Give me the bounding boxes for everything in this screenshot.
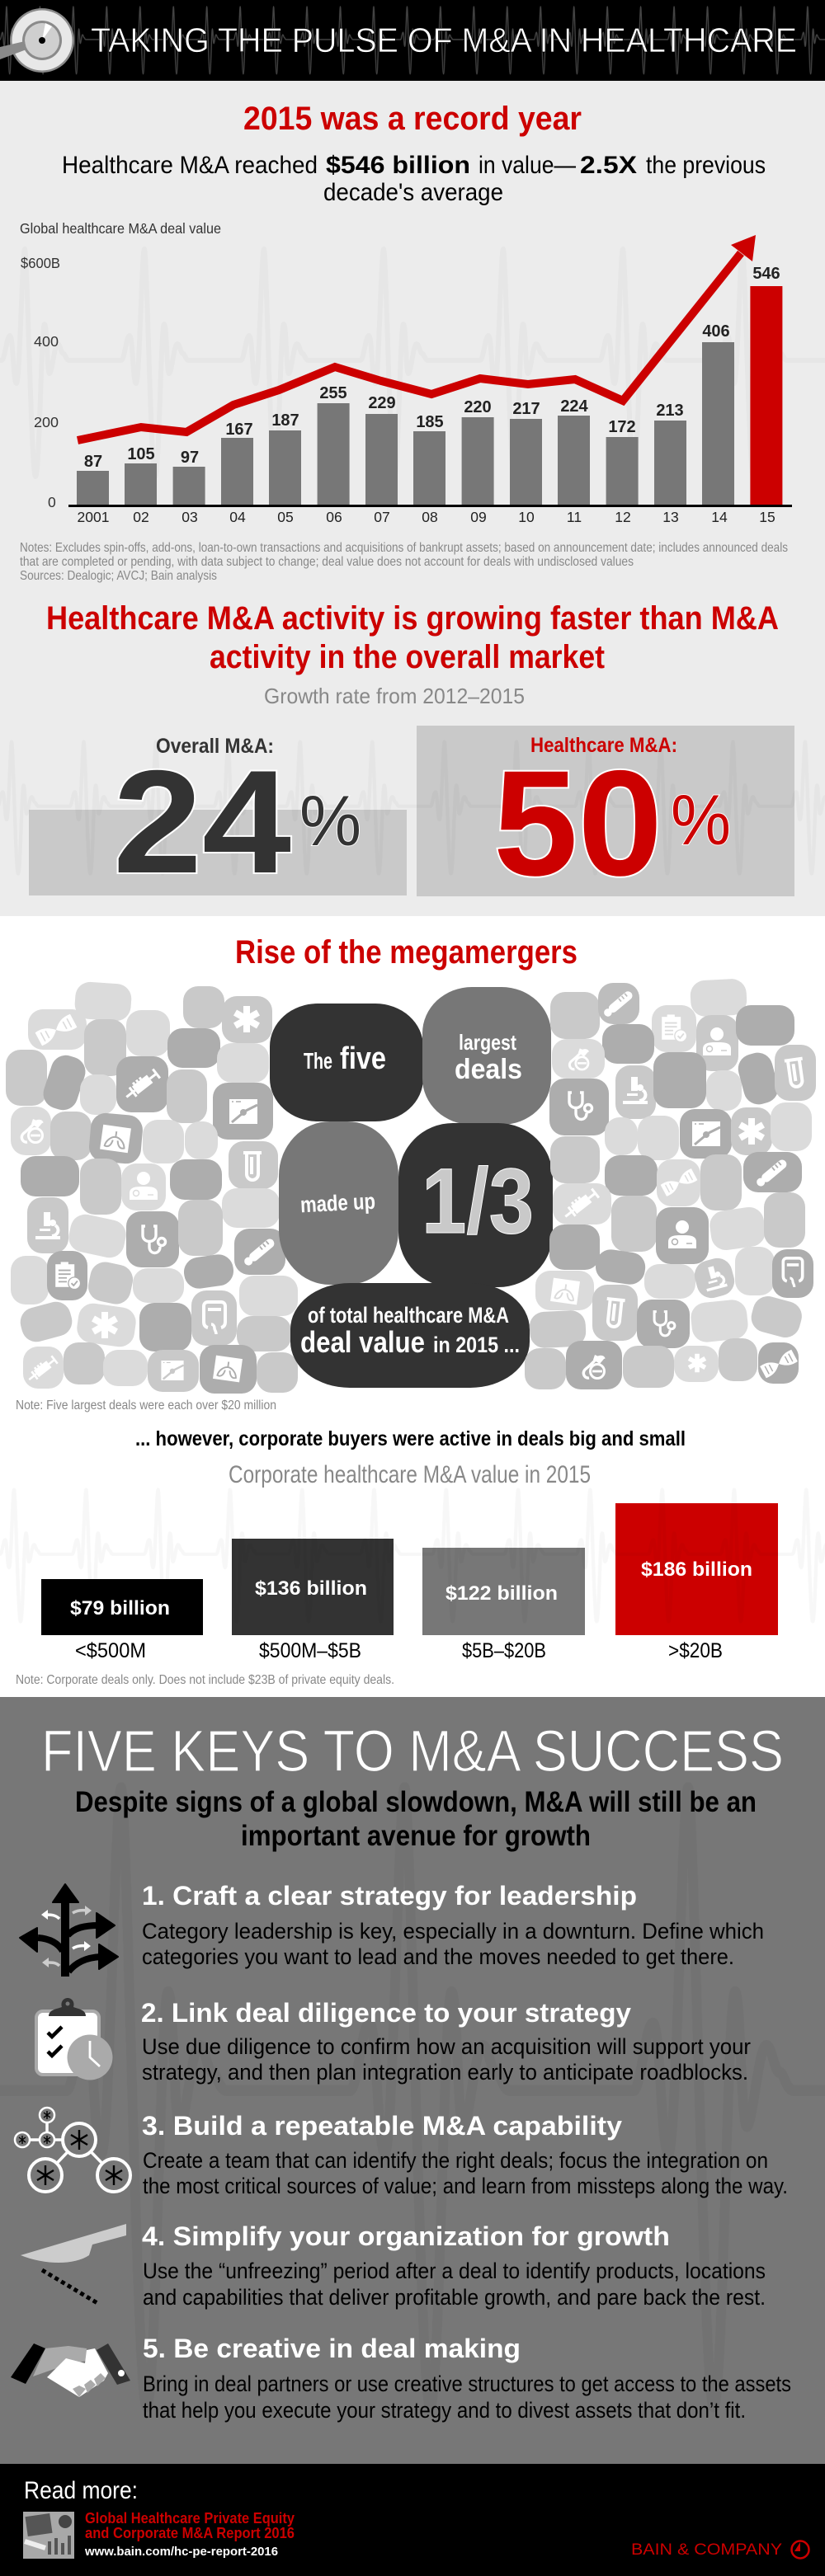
- callout: of total deal value: of total healthcare M&A: [308, 1303, 509, 1328]
- bar value labels: 87: [84, 453, 102, 471]
- y axis labels: $600B: [21, 255, 60, 271]
- bar value labels: 105: [127, 445, 155, 463]
- x axis years: 02: [133, 509, 149, 525]
- bar value labels: 220: [464, 398, 492, 416]
- icon: lungs x-ray: [88, 1112, 144, 1165]
- text block: record year summary: 2.5X: [580, 152, 637, 179]
- bar category labels: >$20B: [668, 1639, 723, 1662]
- heartbeat watermark: growth: [0, 730, 825, 883]
- bar: $500M to $5B: [232, 1539, 394, 1635]
- bar value labels: 255: [319, 384, 347, 402]
- chart: corporate healthcare M&A value: [0, 1478, 825, 1662]
- icon: thermometer: [598, 983, 639, 1024]
- icon: lungs x-ray: [535, 1271, 594, 1310]
- callout: the five: [270, 1004, 423, 1121]
- icon: test tube: [592, 1285, 638, 1341]
- x axis years: 11: [567, 509, 582, 525]
- heading: rise of the megamergers: Rise of the megamergers: [235, 934, 578, 971]
- icon: iv bag: [191, 1290, 237, 1346]
- logo: Bain & Company: BAIN & COMPANY: [631, 2541, 782, 2559]
- text block: report title: and Corporate M&A Report 2016: [85, 2525, 295, 2541]
- note: corporate deals: Note: Corporate deals only. Does not include $23B of private equity deals.: [16, 1673, 394, 1687]
- bar value labels: $186 billion: [641, 1558, 752, 1581]
- trend arrow: [78, 235, 756, 440]
- panel: footer: [0, 2464, 825, 2576]
- bar value labels: 229: [368, 394, 396, 412]
- x axis years: 09: [470, 509, 487, 525]
- bar value labels: 217: [512, 400, 540, 418]
- image: report cover thumbnail: [23, 2512, 74, 2559]
- bar value labels: 187: [271, 411, 299, 430]
- panel: five keys to M&A success: [0, 1697, 825, 2464]
- icon: branching arrows: [20, 1884, 118, 1977]
- text block: record year summary: in value—: [478, 152, 576, 179]
- icon: medical star: [75, 1301, 138, 1349]
- icon: dna: [758, 1342, 799, 1384]
- icon: capability network: [15, 2108, 130, 2192]
- x axis years: 10: [518, 509, 535, 525]
- text block: report title: www.bain.com/hc-pe-report-2016: [84, 2545, 278, 2559]
- x axis years: 2001: [78, 509, 109, 525]
- bar category labels: <$500M: [75, 1639, 146, 1662]
- text block: record year summary: $546 billion: [326, 152, 470, 179]
- key 3 text: Create a team that can identify the right deals; focus the integration on: [143, 2148, 768, 2173]
- callout: of total deal value: [290, 1283, 530, 1388]
- icon: medical star: [731, 1107, 772, 1155]
- icon: test tube: [775, 1045, 816, 1101]
- note: five largest deals: Note: Five largest deals were each over $20 million: [16, 1398, 276, 1413]
- stat: healthcare M&A 50%: Healthcare M&A:: [530, 734, 677, 757]
- callout: made up: made up: [299, 1189, 376, 1217]
- panel: healthcare M&A growth: [417, 726, 794, 896]
- text block: report title: Global Healthcare Private Equity: [85, 2510, 295, 2527]
- text block: record year summary: decade's average: [323, 179, 503, 206]
- callout: the five: The: [304, 1048, 332, 1074]
- heartbeat watermark: chart: [0, 228, 825, 492]
- x axis years: 13: [662, 509, 679, 525]
- x axis years: 14: [711, 509, 728, 525]
- x axis years: 04: [229, 509, 246, 525]
- callout: largest deals: [422, 987, 551, 1125]
- chart notes: Sources: Dealogic; AVCJ; Bain analysis: [20, 569, 217, 583]
- x axis years: 03: [182, 509, 198, 525]
- bar chart: global healthcare M&A deal value: [21, 235, 792, 525]
- icon: doctor: [656, 1207, 709, 1264]
- key 2 text: 2. Link deal diligence to your strategy: [141, 1998, 631, 2028]
- icon: medical star: [674, 1346, 719, 1382]
- key 5 text: that help you execute your strategy and to divest assets that don’t fit.: [143, 2398, 746, 2423]
- key 4 text: Use the “unfreezing” period after a deal to identify products, locations: [143, 2259, 766, 2283]
- subheading: global slowdown: [75, 1786, 757, 1852]
- heading: read more: Read more:: [24, 2477, 138, 2504]
- bar value labels: 97: [181, 449, 199, 467]
- y axis labels: 0: [48, 494, 56, 510]
- y axis labels: 200: [34, 414, 59, 430]
- bar value labels: 224: [560, 397, 589, 416]
- x axis years: 15: [759, 509, 776, 525]
- icon: clipboard and clock: [36, 1998, 112, 2080]
- callout: one third: [398, 1123, 553, 1287]
- icon: thermometer: [743, 1152, 802, 1192]
- icon: checklist: [652, 1005, 696, 1052]
- key 3 text: 3. Build a repeatable M&A capability: [142, 2111, 622, 2141]
- icon: x-ray bone: [680, 1109, 732, 1159]
- key 1 text: Category leadership is key, especially in a downturn. Define which: [142, 1919, 764, 1944]
- key 2 text: Use due diligence to confirm how an acquisition will support your: [142, 2034, 751, 2059]
- chart title: Global healthcare M&A deal value: [20, 220, 221, 237]
- bar: under $500M: [41, 1579, 203, 1635]
- icon: checklist: [47, 1251, 87, 1300]
- bar value labels: $79 billion: [70, 1597, 170, 1619]
- key 3 text: [142, 2111, 788, 2198]
- stat: overall M&A 24%: %: [299, 782, 361, 861]
- icon: syringe: [23, 1347, 64, 1389]
- icon: doctor: [696, 1015, 738, 1071]
- callout: made up: [279, 1121, 398, 1285]
- x axis years: 12: [615, 509, 631, 525]
- bar: over $20B: [615, 1503, 778, 1635]
- chart notes: that are completed or pending, with data subject to change; deal value does not account for deals with undisclosed values: [20, 555, 634, 569]
- y axis labels: 400: [34, 333, 59, 350]
- callout: of total deal value: deal value: [300, 1325, 425, 1359]
- panel: overall M&A growth: [29, 810, 407, 895]
- key 2 text: [141, 1998, 751, 2085]
- heading: growth comparison: [46, 600, 779, 675]
- panel: blob cluster right: [525, 978, 816, 1389]
- panel: megamerger statement: [270, 987, 553, 1388]
- text block: report title: [84, 2510, 295, 2559]
- panel: blob cluster left: [6, 981, 298, 1394]
- y axis labels: [21, 255, 60, 510]
- stat: overall M&A 24%: 24: [113, 740, 291, 904]
- callout: one third: 1/3: [422, 1149, 534, 1253]
- stat: healthcare M&A 50%: 50: [493, 739, 662, 907]
- icon: microscope: [27, 1197, 68, 1253]
- icon: medical star: [222, 996, 272, 1043]
- heading: corporate buyers: ... however, corporate buyers were active in deals big and small: [135, 1427, 686, 1450]
- bar value labels: 213: [656, 402, 684, 420]
- icon: x-ray bone: [148, 1350, 199, 1392]
- bar value labels: $122 billion: [446, 1582, 558, 1605]
- key 1 text: categories you want to lead and the moves needed to get there.: [142, 1944, 734, 1969]
- icon: dna: [657, 1159, 700, 1206]
- icon: microscope: [615, 1065, 656, 1119]
- heading: 2015 was a record year: 2015 was a record year: [243, 101, 582, 137]
- icon: x-ray bone: [213, 1083, 273, 1140]
- stat: overall M&A 24%: [113, 735, 361, 904]
- subheading: global slowdown: important avenue for growth: [241, 1820, 591, 1852]
- key 4 text: and capabilities that deliver profitable growth, and pare back the rest.: [143, 2285, 766, 2310]
- x axis years: 08: [422, 509, 438, 525]
- icon: iv bag: [772, 1249, 813, 1298]
- icon: stethoscope: [549, 1079, 609, 1135]
- icon: microscope: [691, 1255, 738, 1301]
- icon: knife and dotted cut line: [21, 2224, 126, 2303]
- bar value labels: 406: [702, 322, 730, 341]
- heartbeat watermark: corporate: [0, 1478, 825, 1631]
- subheading: growth rate: Growth rate from 2012–2015: [264, 684, 525, 708]
- icon: pills: [11, 1107, 51, 1155]
- bar: $5B to $20B: [422, 1548, 585, 1635]
- callout: of total deal value: in 2015 ...: [433, 1333, 520, 1357]
- icon: stethoscope: [126, 1211, 179, 1267]
- icon: test tube: [229, 1141, 278, 1189]
- subheading: global slowdown: Despite signs of a global slowdown, M&A will still be an: [75, 1786, 757, 1818]
- text block: record year summary: [62, 152, 766, 206]
- icon: syringe: [553, 1183, 611, 1225]
- key 4 text: 4. Simplify your organization for growth: [142, 2221, 670, 2251]
- icon: doctor: [121, 1163, 166, 1210]
- key 1 text: [142, 1881, 764, 1969]
- bar value labels: 167: [225, 421, 253, 439]
- heading: growth comparison: activity in the overall market: [210, 639, 605, 675]
- callout: largest deals: largest: [459, 1030, 516, 1055]
- text block: record year summary: Healthcare M&A reached: [62, 152, 318, 179]
- stat: overall M&A 24%: Overall M&A:: [156, 735, 274, 758]
- bar value labels: $136 billion: [255, 1577, 367, 1600]
- icon: stethoscope gauge: [0, 8, 74, 73]
- icon: syringe: [116, 1056, 168, 1112]
- icon: thermometer: [234, 1229, 285, 1275]
- stat: healthcare M&A 50%: [493, 734, 731, 907]
- bar value labels: [70, 1558, 752, 1619]
- bars: [77, 286, 782, 505]
- icon: stethoscope: [637, 1300, 690, 1348]
- icon: pills: [552, 1039, 605, 1079]
- header banner: [0, 0, 825, 81]
- bar category labels: $500M–$5B: [259, 1639, 361, 1662]
- bar value labels: 546: [752, 265, 780, 283]
- chart notes: [20, 541, 788, 583]
- x axis years: 06: [326, 509, 342, 525]
- bar category labels: $5B–$20B: [462, 1639, 546, 1662]
- icon: lungs x-ray: [200, 1345, 257, 1394]
- key 5 text: 5. Be creative in deal making: [143, 2334, 521, 2363]
- x axis years: 05: [277, 509, 294, 525]
- callout: largest deals: deals: [455, 1054, 522, 1085]
- title: TAKING THE PULSE OF M&A IN HEALTHCARE: [91, 21, 797, 59]
- subheading: corporate value: Corporate healthcare M&A value in 2015: [229, 1461, 591, 1488]
- bar value labels: 172: [608, 418, 636, 436]
- callout: the five: five: [340, 1041, 386, 1076]
- x axis years: [78, 509, 776, 525]
- icon: pills: [566, 1341, 622, 1389]
- panel: record year and growth background: [0, 81, 825, 916]
- bar value labels: 185: [416, 413, 444, 431]
- icon: dna: [28, 1009, 87, 1050]
- key 5 text: [143, 2334, 791, 2423]
- key 4 text: [142, 2221, 766, 2310]
- key 2 text: strategy, and then plan integration early to anticipate roadblocks.: [142, 2060, 748, 2085]
- stat: healthcare M&A 50%: %: [671, 781, 731, 860]
- icon: handshake: [11, 2343, 130, 2397]
- key 1 text: 1. Craft a clear strategy for leadership: [142, 1881, 637, 1911]
- bar category labels: [75, 1639, 723, 1662]
- text block: record year summary: the previous: [646, 152, 766, 179]
- x axis years: 07: [374, 509, 390, 525]
- bar value labels: [84, 265, 780, 471]
